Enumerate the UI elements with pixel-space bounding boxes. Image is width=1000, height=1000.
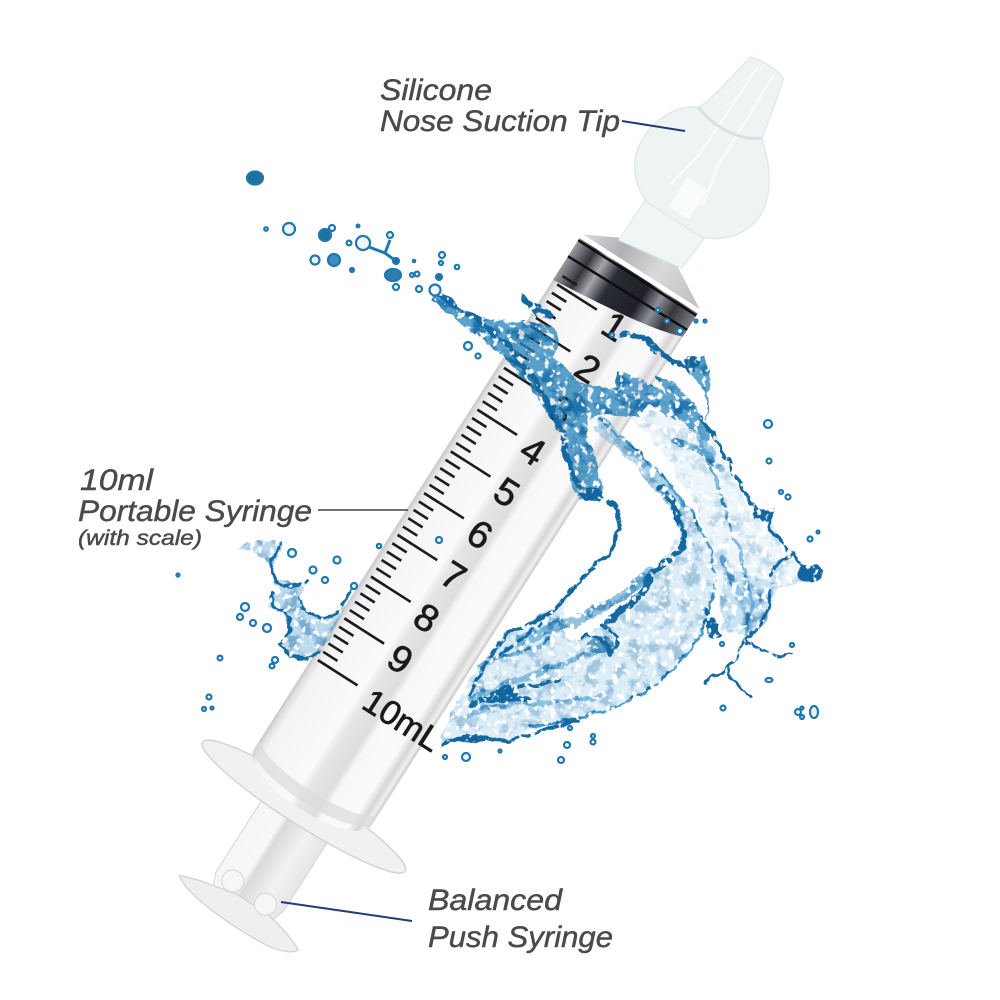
silicone nose suction tip — [590, 29, 831, 297]
plunger thumb dimples — [217, 866, 282, 919]
label: silicone nose suction tip: Nose Suction Tip — [380, 105, 620, 138]
scale numbers: 5 — [486, 470, 526, 517]
leader line: tip — [622, 121, 685, 131]
label: silicone nose suction tip — [380, 74, 620, 138]
water droplets — [176, 172, 820, 763]
label: silicone nose suction tip: Silicone — [380, 74, 492, 107]
label: balanced push syringe: Push Syringe — [428, 921, 613, 954]
luer cone — [582, 214, 713, 310]
crescent sheet — [440, 420, 714, 747]
label: portable syringe: Portable Syringe — [78, 495, 312, 528]
scale numbers: 8 — [406, 595, 446, 642]
scale numbers: 7 — [433, 553, 473, 600]
graduation minor ticks — [324, 280, 570, 666]
scale numbers: 6 — [459, 512, 499, 559]
plunger rod — [208, 784, 338, 927]
dark strands — [271, 290, 818, 745]
stopper rim lines — [581, 236, 699, 311]
scale numbers: 9 — [379, 637, 420, 684]
scale numbers: 3 — [541, 387, 581, 434]
left splash — [238, 540, 353, 661]
scale numbers — [354, 303, 689, 760]
scale numbers: 10mL — [356, 682, 448, 760]
label: balanced push syringe: Balanced — [428, 884, 563, 917]
top dense splash — [433, 288, 650, 500]
leader line: barrel — [318, 509, 408, 511]
scale numbers: 2 — [567, 346, 607, 393]
barrel — [240, 234, 700, 846]
syringe — [128, 4, 875, 988]
plunger end flange — [172, 863, 306, 962]
label: portable syringe: (with scale) — [78, 527, 202, 550]
leader line: plunger — [281, 902, 412, 921]
finger flange — [193, 726, 415, 887]
lower right pool — [720, 570, 775, 636]
rubber stopper — [553, 238, 698, 355]
water splash — [238, 288, 822, 747]
label: portable syringe: 10ml — [80, 464, 154, 497]
mid-blue strands — [470, 395, 760, 727]
scale numbers: 1 — [594, 304, 634, 351]
label: portable syringe — [78, 464, 312, 550]
right finger mass — [615, 355, 709, 440]
barrel base ring — [244, 740, 378, 840]
label: balanced push syringe — [428, 884, 613, 954]
splash dark blobs — [454, 356, 822, 743]
graduation major ticks — [318, 284, 597, 685]
scale numbers: 4 — [512, 428, 553, 475]
right sheet — [630, 413, 820, 637]
splash strands — [271, 290, 818, 745]
